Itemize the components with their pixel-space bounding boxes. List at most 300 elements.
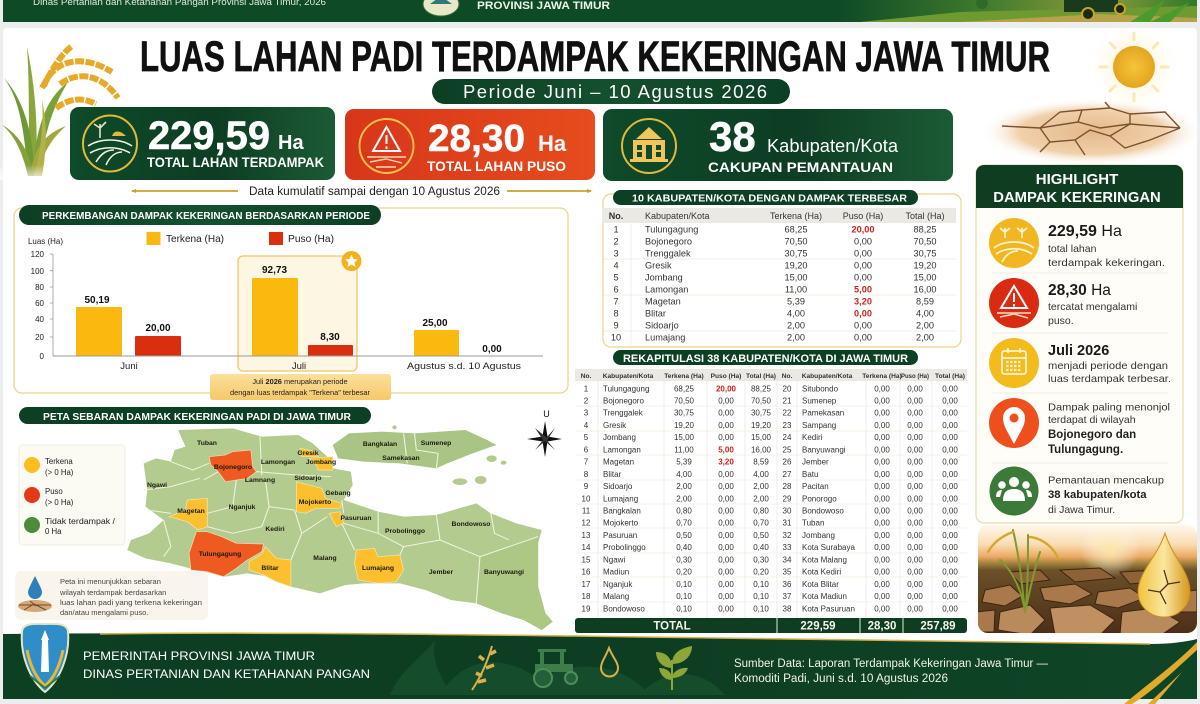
rows: 0,00 xyxy=(907,458,923,467)
rows: 88,25 xyxy=(914,224,936,234)
header row: Puso (Ha) xyxy=(901,374,929,380)
map legend: (> 0 Ha) xyxy=(45,498,74,507)
total row: 28,30 xyxy=(868,620,896,632)
rows: 8 xyxy=(584,470,589,479)
highlight item: coverage: di Jawa Timur. xyxy=(1048,504,1115,516)
icon: water drop on cracked soil xyxy=(18,576,52,612)
rows: 0,00 xyxy=(874,519,890,528)
rows: 0,50 xyxy=(753,531,769,540)
icon: cracked earth top right xyxy=(980,98,1200,166)
value: 229,59 xyxy=(148,114,270,158)
highlight item: total area: terdampak kekeringan. xyxy=(1048,257,1165,269)
emblem of East Java xyxy=(22,624,68,692)
highlight box July xyxy=(238,256,357,371)
rows: 0,00 xyxy=(942,506,958,516)
rows: 2,00 xyxy=(787,333,805,343)
header row xyxy=(575,369,967,381)
rows: 0,00 xyxy=(854,321,872,331)
rows: 0,80 xyxy=(676,506,692,516)
icon: warning with cracked land xyxy=(360,119,414,173)
rows: Jombang xyxy=(603,433,636,442)
rows: Tulungagung xyxy=(645,224,698,234)
rows: Pasuruan xyxy=(603,531,637,540)
rows: 8 xyxy=(613,308,619,318)
highlight item: peak period xyxy=(989,338,1171,388)
drought scene with rice plant and drop xyxy=(975,518,1197,636)
agency name: PEMERINTAH PROVINSI JAWA TIMUR xyxy=(83,649,315,663)
rows: 30,75 xyxy=(674,409,695,418)
y axis: 120 xyxy=(31,250,45,259)
y axis: 20 xyxy=(35,333,45,342)
highlight item: total area: total lahan xyxy=(1048,243,1097,255)
rows: 0,00 xyxy=(907,604,923,613)
chart heading: PERKEMBANGAN DAMPAK KEKERINGAN BERDASARKAN PERIODE xyxy=(42,211,370,222)
rows: 0,00 xyxy=(874,482,890,491)
rows: 2,00 xyxy=(916,321,934,331)
map labels: Mojokerto xyxy=(299,499,331,506)
map labels: Lamnang xyxy=(245,477,275,484)
rows: 70,50 xyxy=(751,396,772,406)
rows: 9 xyxy=(613,321,619,331)
rows: 2,00 xyxy=(753,494,769,503)
header row: Total (Ha) xyxy=(905,211,945,221)
header row: Kabupaten/Kota xyxy=(603,373,654,380)
icon: tractor xyxy=(534,649,577,687)
rows: 0,00 xyxy=(942,519,958,528)
rows: 0,00 xyxy=(874,433,890,442)
rows: 0,00 xyxy=(718,604,734,613)
value labels: 50,19 xyxy=(84,295,110,306)
rows: 3 xyxy=(584,409,589,418)
rows: Bangkalan xyxy=(603,506,641,516)
rows: Sampang xyxy=(802,421,836,430)
total row: 229,59 xyxy=(800,620,836,632)
caption: TOTAL LAHAN TERDAMPAK xyxy=(147,155,324,170)
value labels: 25,00 xyxy=(422,318,448,329)
map labels: Magetan xyxy=(177,508,205,515)
rows: 19,20 xyxy=(914,260,936,270)
highlight item: puso xyxy=(989,278,1137,328)
highlight item: peak period: Juli 2026 xyxy=(1048,343,1109,359)
rows: 19 xyxy=(582,604,591,613)
rows: 70,50 xyxy=(784,237,808,247)
rows: 0,00 xyxy=(854,273,872,283)
header row: Kabupaten/Kota xyxy=(645,211,710,221)
rows: 0,00 xyxy=(942,604,958,613)
map heading xyxy=(19,407,371,424)
rows: 1 xyxy=(584,384,589,393)
rice plant xyxy=(988,530,1058,612)
rows: Ngawi xyxy=(603,555,625,564)
rows: 0,00 xyxy=(874,458,890,467)
cracked ground xyxy=(975,568,1197,636)
header row: No. xyxy=(609,211,623,221)
rows: 0,00 xyxy=(874,506,890,516)
rows: 5,00 xyxy=(854,284,872,294)
highlight item: total area xyxy=(989,218,1165,269)
header row: Total (Ha) xyxy=(746,373,776,380)
rows: 0,00 xyxy=(942,592,958,601)
map of East Java xyxy=(127,425,553,630)
unit: Ha xyxy=(278,132,304,154)
rows: 15,00 xyxy=(914,273,936,283)
rows: Banyuwangi xyxy=(802,445,846,454)
banner landscape with tractor xyxy=(860,0,1197,22)
rows: 4,00 xyxy=(787,308,805,318)
value labels: 0,00 xyxy=(482,344,502,355)
rows: 0,00 xyxy=(907,409,923,418)
rows: Trenggalek xyxy=(645,248,691,258)
rows: 0,00 xyxy=(854,260,872,270)
map labels: Bojonegoro xyxy=(214,464,252,471)
header row: Puso (Ha) xyxy=(843,211,883,221)
rows: 4,00 xyxy=(676,470,692,479)
callout xyxy=(210,374,391,400)
rows: 5,00 xyxy=(718,445,734,454)
rows: Situbondo xyxy=(802,384,839,393)
rows: 11 xyxy=(582,506,591,516)
rows: 0,00 xyxy=(907,445,923,454)
rows: 0,00 xyxy=(874,445,890,454)
stat card: total lahan puso xyxy=(345,109,595,180)
rows: Lamongan xyxy=(603,445,641,454)
unit: Ha xyxy=(538,131,567,156)
rows: 70,50 xyxy=(914,237,936,247)
rows: 7 xyxy=(613,296,619,306)
highlight item: coverage xyxy=(990,466,1164,516)
rows: 5,39 xyxy=(787,296,805,306)
rows: 12 xyxy=(582,519,591,528)
rows: 0,00 xyxy=(907,506,923,516)
panel: top 10 table xyxy=(602,190,961,347)
map labels: Sidoarjo xyxy=(294,475,322,482)
map legend: 0 Ha xyxy=(45,527,62,536)
header row: Terkena (Ha) xyxy=(770,211,822,221)
rows: 5 xyxy=(584,433,589,442)
rows: 0,00 xyxy=(718,506,734,516)
rows: Tulungagung xyxy=(603,384,649,393)
rows: 0,00 xyxy=(874,604,890,613)
highlight item: puso: tercatat mengalami xyxy=(1048,301,1137,313)
value: 28,30 xyxy=(428,118,525,160)
rows: Jombang xyxy=(645,273,683,283)
map labels: Lamongan xyxy=(261,459,295,466)
note text: dan/atau mengalami puso. xyxy=(60,608,148,617)
rows: 0,00 xyxy=(874,494,890,503)
rows: 0,00 xyxy=(874,470,890,479)
map labels: Probolinggo xyxy=(385,528,425,535)
icon: rice stalk xyxy=(472,646,496,690)
map legend: Puso xyxy=(45,487,63,496)
rows: 2,00 xyxy=(916,333,934,343)
rows: 0,00 xyxy=(718,421,734,430)
rows: 2,00 xyxy=(753,482,769,491)
icon: sun xyxy=(1086,19,1182,115)
rows: Tuban xyxy=(802,519,824,528)
note text: Peta ini menunjukkan sebaran xyxy=(60,577,161,586)
rows: Kediri xyxy=(802,433,823,442)
category labels: Juli xyxy=(292,361,306,372)
rows: 1 xyxy=(613,224,619,234)
rows: 15,00 xyxy=(751,433,772,442)
map heading: PETA SEBARAN DAMPAK KEKERINGAN PADI DI JAWA TIMUR xyxy=(43,412,351,423)
rows: 0,00 xyxy=(874,384,890,393)
rows: 0,00 xyxy=(942,482,958,491)
rows: 0,10 xyxy=(676,580,692,589)
icon: rice plant left xyxy=(0,46,118,180)
rows: 15,00 xyxy=(674,433,695,442)
map legend: (> 0 Ha) xyxy=(45,468,74,477)
rows: Bojonegoro xyxy=(645,237,692,247)
rows: 0,00 xyxy=(942,580,958,589)
chart heading xyxy=(19,205,381,225)
total row: TOTAL xyxy=(653,620,691,632)
rows: 0,00 xyxy=(718,494,734,503)
icon: golden drop with crack xyxy=(1138,533,1190,617)
highlight item: most affected regions: Tulungagung. xyxy=(1048,444,1123,456)
highlight heading: DAMPAK KEKERINGAN xyxy=(993,190,1161,206)
rows: Malang xyxy=(603,592,629,601)
caption: TOTAL LAHAN PUSO xyxy=(427,159,566,174)
rows: 0,00 xyxy=(718,580,734,589)
highlight item: most affected regions: terdapat di wilayah xyxy=(1048,414,1136,426)
rows: Gresik xyxy=(645,260,672,270)
total row: 257,89 xyxy=(920,620,956,632)
banner province name: PROVINSI JAWA TIMUR xyxy=(477,0,610,12)
rows: 34 xyxy=(783,555,792,564)
rows: 0,00 xyxy=(874,409,890,418)
note text: wilayah terdampak berdasarkan xyxy=(59,588,166,597)
rows: 2,00 xyxy=(676,494,692,503)
rows: 0,00 xyxy=(942,555,958,564)
rows: 0,00 xyxy=(907,568,923,577)
rows: 17 xyxy=(582,580,591,589)
rows: 88,25 xyxy=(751,384,772,393)
rows: 5,39 xyxy=(676,458,692,467)
rows: 2 xyxy=(584,396,589,406)
rows: 0,00 xyxy=(874,396,890,406)
rows: 0,00 xyxy=(907,580,923,589)
category labels xyxy=(120,361,521,372)
rows: 30,75 xyxy=(751,409,772,418)
highlight item: peak period: luas terdampak terbesar. xyxy=(1048,373,1171,385)
rows: 0,00 xyxy=(874,531,890,540)
rows: 2,00 xyxy=(787,321,805,331)
header row xyxy=(602,208,956,223)
rows xyxy=(575,369,967,618)
rows: 5 xyxy=(613,273,619,283)
rows: 0,00 xyxy=(854,308,872,318)
highlight heading: HIGHLIGHT xyxy=(1036,171,1118,188)
value labels: 92,73 xyxy=(262,265,287,276)
rows: 3 xyxy=(613,248,619,258)
rows: 2 xyxy=(613,237,619,247)
rows: 70,50 xyxy=(674,396,695,406)
rows: 35 xyxy=(783,568,792,577)
header row: Puso (Ha) xyxy=(711,373,741,380)
rows: 22 xyxy=(783,409,792,418)
highlight item: total area: 229,59 Ha xyxy=(1048,223,1122,240)
value labels xyxy=(84,265,502,355)
rows: 0,00 xyxy=(718,409,734,418)
rows: Bojonegoro xyxy=(603,396,644,406)
footer background plants xyxy=(390,640,725,695)
rows: 0,30 xyxy=(676,555,692,564)
rows: 0,00 xyxy=(718,568,734,577)
rows: 0,00 xyxy=(907,384,923,393)
category labels: Agustus s.d. 10 Agustus xyxy=(407,361,521,372)
rows: 11,00 xyxy=(785,284,807,294)
rows: 0,00 xyxy=(718,531,734,540)
y axis: 60 xyxy=(35,299,45,308)
rows: 10 xyxy=(582,494,591,503)
y axis: 80 xyxy=(35,283,45,292)
rows: 4,00 xyxy=(753,470,769,479)
rows: 0,10 xyxy=(676,592,692,601)
rows: 0,00 xyxy=(907,433,923,442)
rows: 0,20 xyxy=(676,568,692,577)
rows: 9 xyxy=(584,482,589,491)
data source xyxy=(734,658,1048,685)
y axis: 40 xyxy=(35,315,45,324)
rows: 15 xyxy=(582,555,591,564)
rows: Kota Surabaya xyxy=(802,543,855,552)
y axis xyxy=(31,250,53,361)
rows: 38 xyxy=(783,604,792,613)
note text xyxy=(59,577,202,617)
panel: highlight xyxy=(976,165,1183,523)
rows: 3,20 xyxy=(854,296,872,306)
rows: 0,00 xyxy=(942,543,958,552)
rows: Gresik xyxy=(603,421,627,430)
rows: Pacitan xyxy=(802,482,829,491)
note text: luas lahan padi yang terkena kekeringan xyxy=(60,598,202,607)
cumulative data note xyxy=(131,186,592,198)
rows: 0,00 xyxy=(942,433,958,442)
rows: Sumenep xyxy=(802,396,837,406)
map labels: Bondowoso xyxy=(452,521,490,528)
map labels: Lumajang xyxy=(362,565,394,572)
baseline xyxy=(53,355,543,357)
header row: Terkena (Ha) xyxy=(862,373,902,380)
map labels: Gresik xyxy=(297,450,319,457)
map legend: Tidak terdampak / xyxy=(45,517,116,526)
map labels: Sumenep xyxy=(421,440,451,447)
rows: 27 xyxy=(783,470,792,479)
rows: 0,00 xyxy=(854,237,872,247)
rows: Lumajang xyxy=(645,333,685,343)
rows: 30,75 xyxy=(914,248,936,258)
rows: Magetan xyxy=(603,458,634,467)
rows: 20,00 xyxy=(852,224,874,234)
rows: 30 xyxy=(783,506,792,516)
rows: Blitar xyxy=(645,308,666,318)
rows: 0,00 xyxy=(718,555,734,564)
map labels xyxy=(147,440,524,576)
map labels: Bangkalan xyxy=(363,441,397,448)
value labels: 20,00 xyxy=(145,323,171,334)
panel: bar chart xyxy=(14,205,568,400)
header row: Total (Ha) xyxy=(935,373,965,380)
rows: Bondowoso xyxy=(603,604,645,613)
rows: 0,00 xyxy=(907,592,923,601)
rows: 3,20 xyxy=(718,458,734,467)
unit: Kabupaten/Kota xyxy=(767,135,899,156)
chart legend xyxy=(146,232,334,245)
rows: 20,00 xyxy=(716,384,737,393)
rows: 0,00 xyxy=(942,421,958,430)
rows: 30,75 xyxy=(784,248,808,258)
banner emblem xyxy=(423,0,459,16)
rows: Nganjuk xyxy=(603,580,633,589)
rows: Kota Madiun xyxy=(802,592,847,601)
rows: Magetan xyxy=(645,296,681,306)
rows: 19,20 xyxy=(784,260,808,270)
rows: 0,00 xyxy=(874,421,890,430)
chart legend: Puso (Ha) xyxy=(288,233,334,245)
map labels: Nganjuk xyxy=(229,504,256,511)
rows: 10 xyxy=(611,333,621,343)
gold ribbon xyxy=(1124,642,1197,704)
rows: 0,50 xyxy=(676,531,692,540)
rows: 0,00 xyxy=(907,494,923,503)
rows: Pamekasan xyxy=(802,409,844,418)
rows: 0,00 xyxy=(942,470,958,479)
rows: Jember xyxy=(802,458,829,467)
agency name: DINAS PERTANIAN DAN KETAHANAN PANGAN xyxy=(83,667,370,681)
map labels: Jombang xyxy=(306,459,336,466)
cumulative data note: Data kumulatif sampai dengan 10 Agustus 2026 xyxy=(249,186,500,198)
rows: 0,00 xyxy=(942,568,958,577)
table heading: 10 KABUPATEN/KOTA DENGAN DAMPAK TERBESAR xyxy=(632,192,907,204)
rows: 23 xyxy=(783,421,792,430)
callout: dengan luas terdampak "Terkena" terbesar xyxy=(230,388,371,397)
rows: Trenggalek xyxy=(603,409,644,418)
rows: 25 xyxy=(783,445,792,454)
map legend xyxy=(19,445,125,545)
rows: Batu xyxy=(802,470,818,479)
compass xyxy=(527,409,562,457)
rows: 0,00 xyxy=(874,568,890,577)
rows: 0,00 xyxy=(907,519,923,528)
rows: 2,00 xyxy=(676,482,692,491)
rows: 11,00 xyxy=(674,445,694,454)
rows: 31 xyxy=(783,519,792,528)
data source: Sumber Data: Laporan Terdampak Kekeringan Jawa Timur — xyxy=(734,658,1048,670)
header row: No. xyxy=(581,373,591,380)
map labels: Jember xyxy=(429,569,453,576)
footer xyxy=(3,624,1197,704)
rows: 0,40 xyxy=(676,543,692,552)
rows: 15,00 xyxy=(784,273,808,283)
rows: 32 xyxy=(783,531,792,540)
rows: 7 xyxy=(584,458,589,467)
rows: 0,10 xyxy=(753,592,769,601)
rows: 19,20 xyxy=(674,421,695,430)
map legend: Terkena xyxy=(45,457,73,466)
rows: Kota Malang xyxy=(802,555,847,564)
star badge xyxy=(342,251,362,271)
rows: 0,00 xyxy=(942,531,958,540)
map labels: Samekasan xyxy=(382,455,420,462)
highlight heading xyxy=(976,165,1183,208)
category labels: Juni xyxy=(120,361,138,372)
rows: 20 xyxy=(783,384,792,393)
caption: CAKUPAN PEMANTAUAN xyxy=(708,159,893,175)
map labels: Blitar xyxy=(261,565,279,572)
rows: 18 xyxy=(582,592,591,601)
rows: 0,00 xyxy=(942,458,958,467)
